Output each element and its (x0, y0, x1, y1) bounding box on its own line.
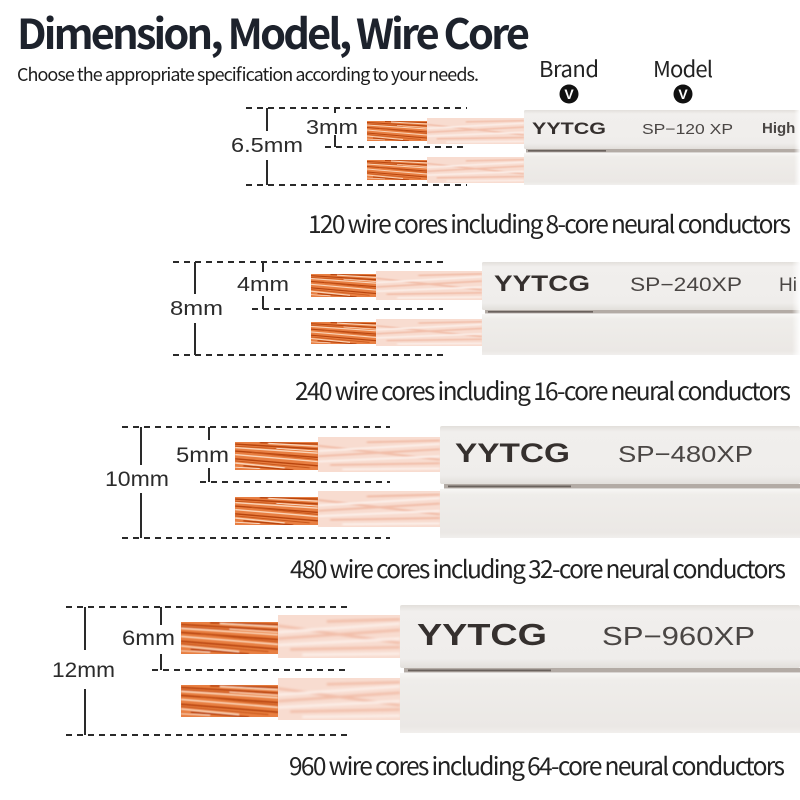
model marker: V (678, 86, 688, 102)
white cable sheath (482, 258, 800, 358)
dimension lines: 8mm and 4mm (170, 262, 443, 355)
panel: 240 wire core cable (170, 258, 800, 408)
panel: 960 wire core cable (52, 605, 800, 783)
sheath printing (417, 617, 755, 652)
bare copper conductors (367, 121, 427, 180)
dimension lines: 12mm and 6mm (52, 607, 350, 735)
clear insulated conductors (427, 118, 524, 183)
sheath printing: Hi (779, 275, 797, 296)
sheath printing: YYTCG (455, 438, 570, 468)
white cable sheath (524, 105, 800, 190)
sheath printing: YYTCG (494, 271, 590, 296)
dimension lines: 10mm and 5mm: 5mm (176, 444, 229, 467)
dimension lines: 10mm and 5mm (105, 427, 390, 538)
dimension lines: 12mm and 6mm: 12mm (52, 659, 115, 682)
model marker: Model (653, 52, 713, 84)
caption: 120 wire cores including 8-core neural conductors (308, 206, 791, 241)
caption: 960 wire cores including 64-core neural conductors (289, 748, 785, 783)
brand marker: Brand (539, 52, 599, 84)
sheath printing: High (762, 120, 795, 137)
sheath printing (532, 120, 795, 138)
dimension lines: 10mm and 5mm: 10mm (105, 468, 169, 491)
clear insulated conductors (318, 437, 440, 527)
caption: 480 wire cores including 32-core neural conductors (290, 551, 786, 586)
brand marker (539, 52, 599, 104)
dimension lines: 8mm and 4mm: 8mm (170, 297, 223, 320)
white cable sheath (440, 426, 800, 538)
panel: 480 wire core cable (105, 426, 800, 586)
dimension lines: 12mm and 6mm: 6mm (122, 627, 175, 650)
bare copper conductors (181, 622, 278, 717)
white cable sheath (400, 605, 800, 733)
sheath printing (494, 271, 797, 296)
sheath printing: SP−960XP (602, 621, 755, 651)
sheath printing (455, 438, 753, 468)
clear insulated conductors (278, 615, 400, 720)
caption: 240 wire cores including 16-core neural conductors (295, 373, 791, 408)
panel: 120 wire core cable (231, 105, 800, 241)
brand marker: V (564, 86, 574, 102)
bare copper conductors (235, 442, 318, 525)
dimension lines: 6.5mm and 3mm: 3mm (306, 117, 358, 139)
dimension lines: 8mm and 4mm: 4mm (237, 273, 289, 296)
title: Dimension, Model, Wire Core (17, 1, 530, 61)
subtitle: Choose the appropriate specification according to your needs. (17, 61, 479, 87)
sheath printing: SP−240XP (630, 274, 742, 296)
clear insulated conductors (376, 271, 482, 346)
sheath printing: SP−120 XP (642, 122, 733, 138)
sheath printing: SP−480XP (618, 441, 753, 467)
bare copper conductors (311, 274, 376, 344)
dimension lines: 6.5mm and 3mm (231, 108, 467, 185)
sheath printing: YYTCG (417, 617, 547, 652)
model marker (653, 52, 713, 104)
sheath printing: YYTCG (532, 120, 606, 138)
dimension lines: 6.5mm and 3mm: 6.5mm (231, 135, 303, 157)
